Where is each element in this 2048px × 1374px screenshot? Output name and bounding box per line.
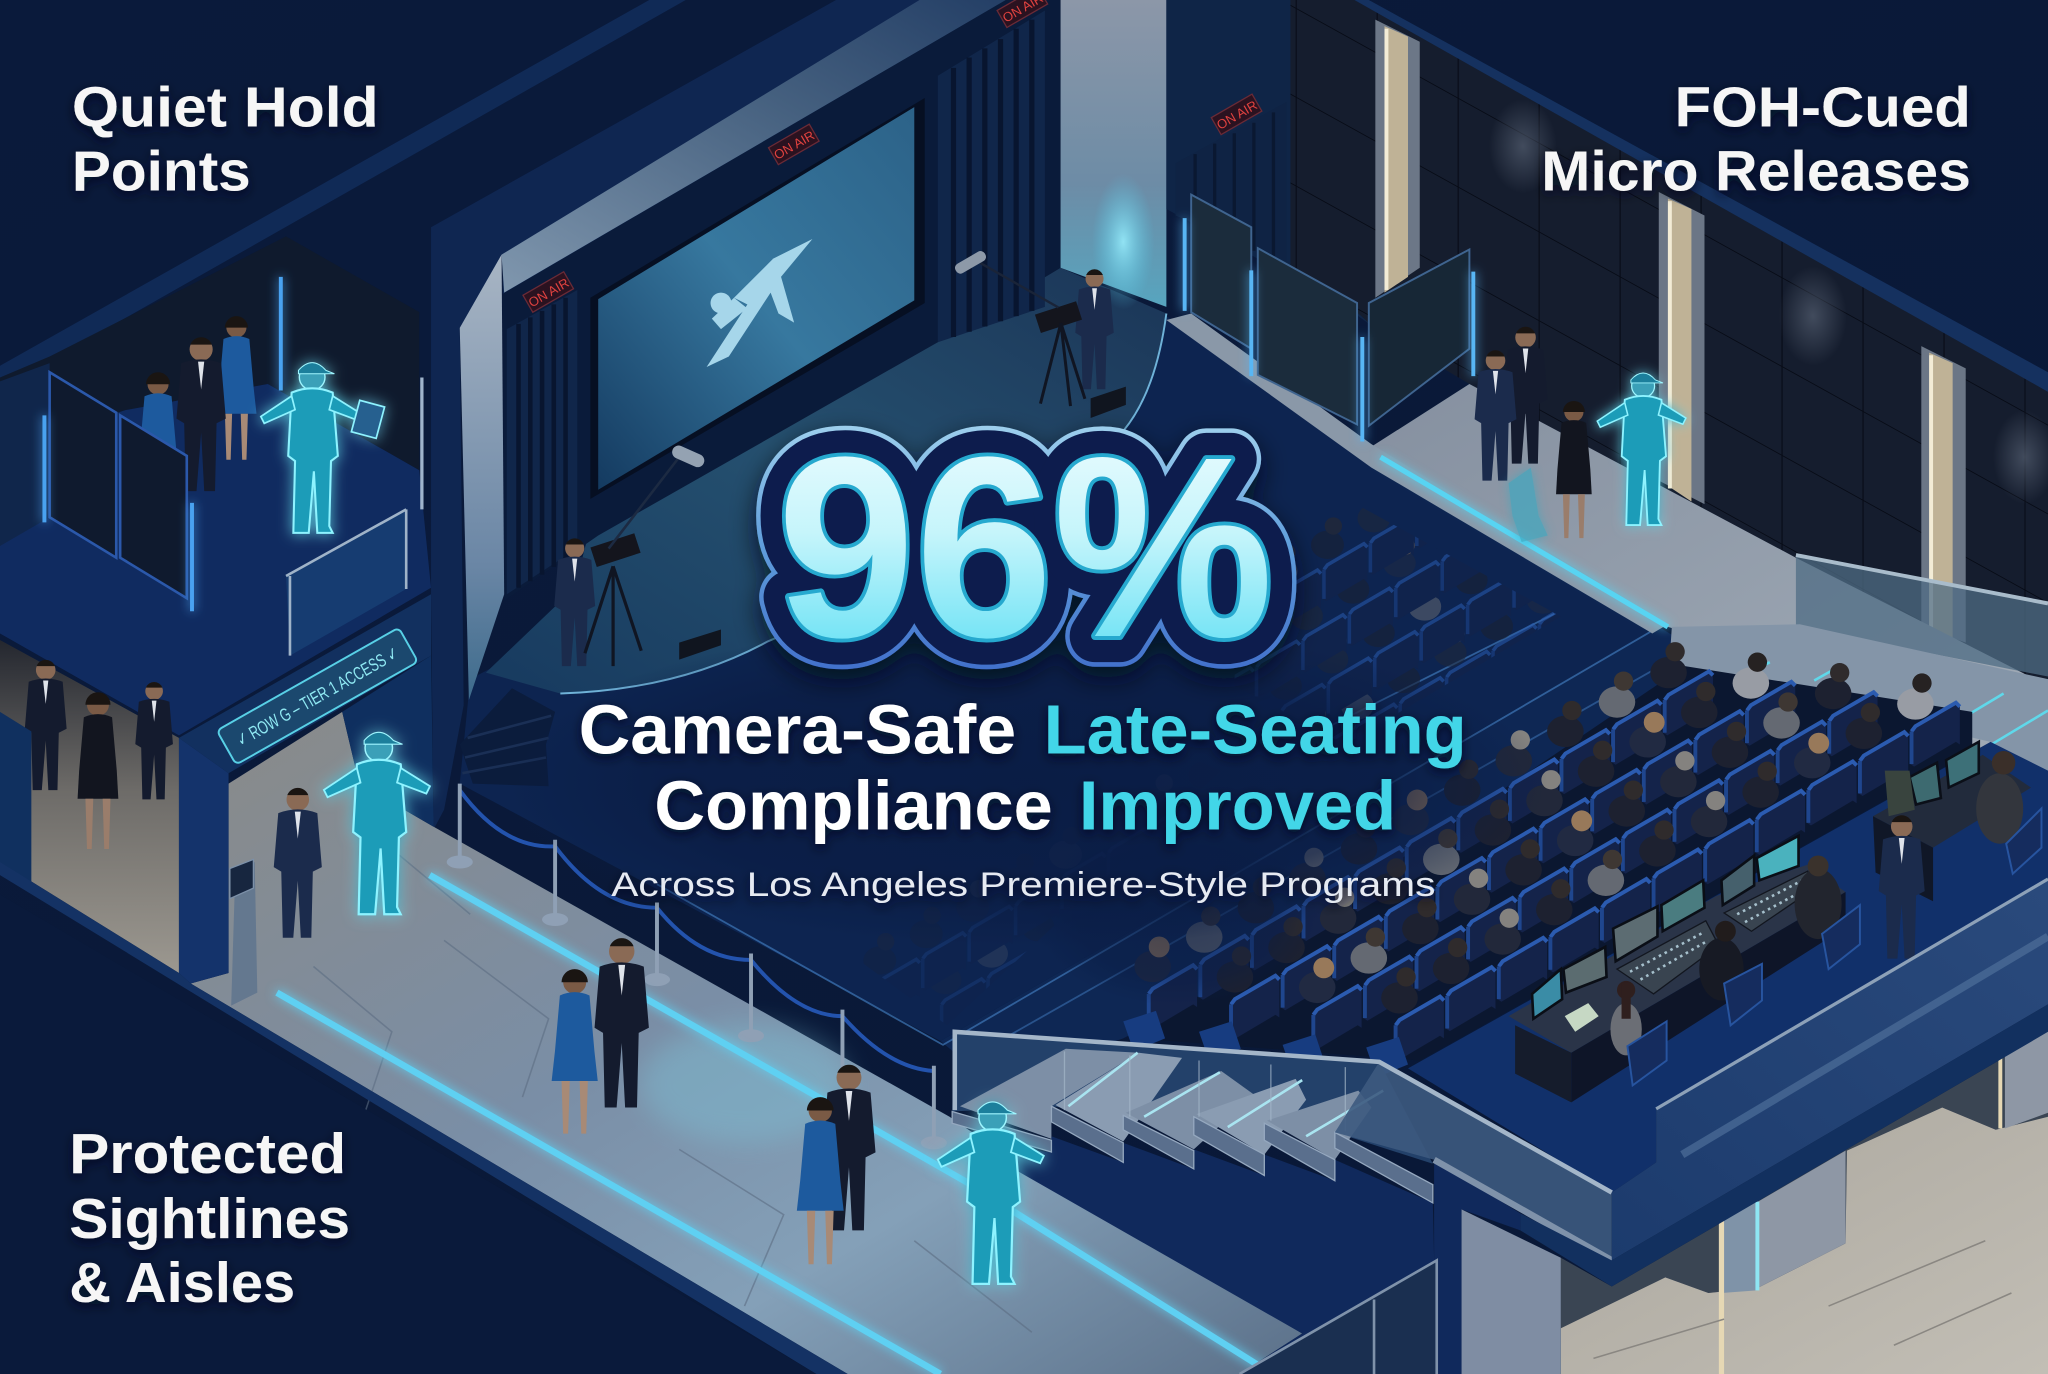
lower glass rail bbox=[1240, 1260, 1437, 1374]
subtitle: Across Los Angeles Premiere-Style Programs bbox=[611, 866, 1435, 904]
panel: audience seating bbox=[1123, 642, 1972, 1078]
guest at door bbox=[274, 788, 322, 938]
operator rear bbox=[1976, 751, 2023, 844]
seat cushions bbox=[1123, 1011, 1408, 1078]
panel: parapet bbox=[1520, 879, 2048, 1286]
camera operator right bbox=[953, 249, 1114, 406]
stair stringers bbox=[952, 1106, 1433, 1203]
under-balcony columns bbox=[1593, 1027, 2048, 1374]
panel: right silver column bbox=[1061, 0, 1166, 310]
text backdrop vignette bbox=[503, 620, 1548, 947]
operator seated one bbox=[1610, 981, 1642, 1055]
headline: Late-Seating bbox=[1044, 691, 1467, 769]
left wall of hold room bbox=[0, 363, 50, 546]
hologram usher hold room bbox=[261, 363, 385, 533]
silver proscenium left bbox=[460, 255, 504, 700]
wall light strip 1 bbox=[1375, 20, 1420, 298]
panel: left lobby marble bbox=[0, 640, 179, 973]
glass rail hold room bbox=[286, 509, 406, 656]
label: FOH-cued micro releases: Micro Releases bbox=[1541, 140, 1971, 203]
door pillar bbox=[179, 738, 229, 983]
panel: hold room carpet floor bbox=[0, 384, 431, 735]
label: protected sightlines and aisles: & Aisles bbox=[69, 1251, 295, 1314]
blue corner and silver pillar lower bbox=[1434, 1160, 1612, 1374]
panel: bottom right marble bbox=[1561, 1108, 2048, 1374]
big stat: 96%: 96% bbox=[777, 403, 1273, 691]
hologram fragment bbox=[1509, 468, 1548, 542]
operator seated two bbox=[1699, 921, 1744, 1000]
seat assignment sign: ✓ ROW G – TIER 1 ACCESS ✓ bbox=[233, 642, 402, 750]
label: FOH-cued micro releases: FOH-Cued bbox=[1674, 76, 1971, 139]
walkway light strips bbox=[277, 875, 1272, 1374]
silver proscenium top bbox=[502, 0, 1006, 293]
couple two bbox=[797, 1065, 876, 1264]
step light lines bbox=[1068, 1053, 1383, 1136]
camera operator left bbox=[554, 533, 641, 666]
stair treads bbox=[960, 1049, 1371, 1160]
couple one bbox=[552, 938, 649, 1134]
big stat: 96%: 96% bbox=[777, 403, 1273, 691]
panel: right partitions and posts bbox=[1166, 195, 1668, 633]
on air sign 2: ON AIR bbox=[771, 127, 817, 163]
panel: under-balcony back wall bbox=[1561, 1032, 2048, 1328]
wall light strip 2 bbox=[1659, 192, 1704, 504]
standing camera operator bbox=[1879, 815, 1925, 959]
big stat: 96%: 96% bbox=[777, 403, 1273, 691]
headline bbox=[579, 691, 1467, 844]
headline: Camera-Safe bbox=[579, 691, 1016, 769]
top-left ceiling ridge bbox=[0, 0, 686, 389]
hold room panels bbox=[44, 277, 422, 611]
dim seating block bbox=[1234, 508, 1556, 739]
dim lower seating bbox=[877, 904, 1026, 1022]
hologram usher walkway bbox=[938, 1102, 1044, 1284]
rear control desk bbox=[1873, 742, 2031, 901]
cinema screen bbox=[590, 98, 925, 499]
panel: control platform carpet bbox=[1408, 742, 2048, 1192]
hologram usher corridor bbox=[1597, 373, 1686, 525]
panel: hold room wall bbox=[0, 236, 419, 470]
label: quiet hold points: Points bbox=[72, 140, 251, 203]
main control desk bbox=[1509, 836, 1846, 1102]
stanchions with rope bbox=[447, 784, 947, 1149]
label: protected sightlines and aisles: Sightlines bbox=[69, 1187, 350, 1250]
panel: stage floor bbox=[486, 268, 1166, 694]
stair top rail bbox=[955, 1032, 1612, 1192]
navy band under walkway bbox=[0, 862, 848, 1374]
corridor guests bbox=[1475, 327, 1592, 538]
panel: proscenium wall bbox=[431, 0, 1061, 829]
seat fade shadow bbox=[1032, 823, 1319, 1006]
icon: screen logo bbox=[707, 239, 812, 367]
panel: right corridor wall bbox=[1290, 0, 2048, 692]
curtain right bbox=[938, 10, 1045, 342]
panel: main marble walkway bbox=[191, 712, 1302, 1374]
label: protected sightlines and aisles: Protected bbox=[69, 1122, 346, 1185]
floor monitors on stage bbox=[679, 387, 1126, 660]
headline: Improved bbox=[1079, 766, 1396, 844]
stage steps bbox=[460, 688, 555, 786]
seat assignment sign bbox=[217, 628, 418, 765]
hologram usher door bbox=[324, 732, 430, 914]
check-in kiosk bbox=[230, 859, 257, 1006]
panel: wall under stairs bbox=[1016, 1136, 1437, 1374]
on air sign 4: ON AIR bbox=[1214, 97, 1260, 133]
right side dark wall bbox=[1166, 0, 1373, 327]
navy triangle bbox=[0, 895, 816, 1374]
operator chairs bbox=[1627, 808, 2041, 1085]
wall light strip 3 bbox=[1921, 346, 1966, 643]
glass railing upper right bbox=[1796, 555, 2048, 677]
label: FOH-cued micro releases bbox=[1541, 76, 1971, 203]
panel: right corridor marble floor bbox=[1371, 384, 2048, 797]
control operators bbox=[1610, 751, 2023, 1055]
doorway header bbox=[179, 594, 431, 773]
on air sign 1: ON AIR bbox=[526, 275, 572, 310]
panel: stair glass and steps bbox=[952, 1032, 1433, 1164]
blue glass landing bbox=[1335, 1062, 1612, 1260]
monitors front bbox=[1532, 836, 1799, 1019]
operator seated three bbox=[1795, 855, 1842, 939]
lobby guests bbox=[25, 660, 173, 849]
lobby partition bbox=[0, 712, 38, 891]
curtain left bbox=[507, 290, 577, 594]
label: protected sightlines and aisles bbox=[69, 1122, 350, 1314]
stairs upper right bbox=[1669, 624, 2048, 771]
boom microphone bbox=[609, 443, 706, 549]
label: quiet hold points: Quiet Hold bbox=[72, 76, 379, 139]
panel: central carpet bbox=[460, 313, 1724, 1084]
guest group in hold room bbox=[137, 316, 257, 522]
label: quiet hold points bbox=[72, 76, 379, 203]
mixing consoles bbox=[1565, 871, 1813, 1032]
headline: Compliance bbox=[654, 766, 1053, 844]
door right backdrop bbox=[342, 656, 434, 827]
